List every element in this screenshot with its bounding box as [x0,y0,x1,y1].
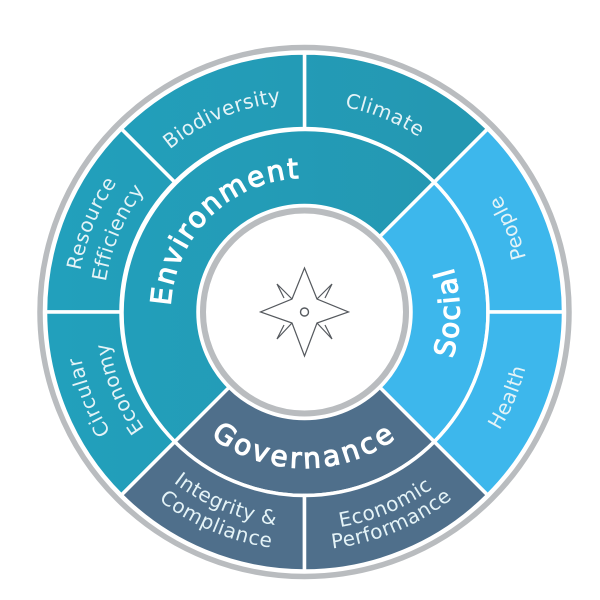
label: Climate: Climate [347,94,422,136]
label: Economic: Economic [339,480,432,527]
segment: Climate [304,53,488,182]
heading: Environment: Environment [150,158,299,304]
social core segment [380,182,488,442]
segment: Integrity & Compliance [121,442,304,571]
environment core segment [122,130,434,442]
label: Biodiversity: Biodiversity [162,91,279,148]
outer gray ring [40,48,569,576]
ESG wheel diagram [37,44,572,580]
label: Resource: Resource [66,179,116,269]
inner gray ring [203,210,406,414]
label: Economy: Economy [98,346,144,436]
segment: Circular Economy [46,312,175,495]
segment: Economic Performance [304,442,488,571]
label: Health: Health [488,368,526,429]
segment: Biodiversity [121,53,304,182]
label: Circular: Circular [70,359,108,436]
label: Performance: Performance [332,492,451,548]
segment: Resource Efficiency [46,129,175,312]
label: Integrity &: Integrity & [175,472,276,525]
label: Compliance: Compliance [162,491,271,548]
heading: Social: Social [432,269,460,358]
heading: Governance: Governance [214,423,394,469]
panel: social [380,128,562,492]
label: People: People [492,196,526,260]
icon: compass star [260,268,348,356]
panel: environment [47,54,486,492]
segment: Health [434,312,564,495]
governance core segment [175,387,434,495]
segment: People [434,129,564,312]
label: Efficiency: Efficiency [92,184,144,280]
panel: governance [122,387,488,570]
